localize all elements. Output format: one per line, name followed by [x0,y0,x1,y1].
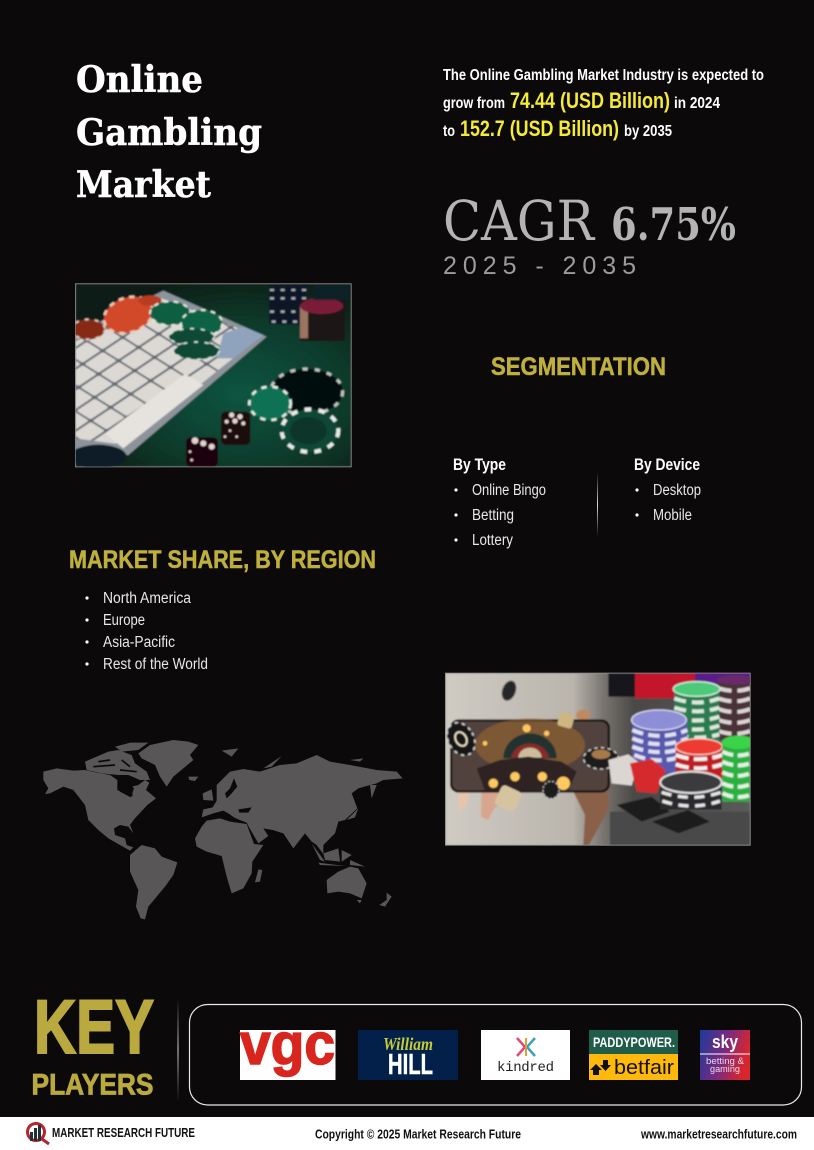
title: Online [76,59,203,101]
CAGR callout: CAGR [443,189,595,253]
market growth statement [443,67,764,141]
chips flying [500,680,518,702]
segment list: by device [634,455,701,524]
islands [188,748,377,867]
heading: segmentation: SEGMENTATION [491,353,666,381]
market growth statement: in 2024 [674,95,720,112]
CAGR callout: 2025 - 2035 [443,252,636,280]
market growth statement: to [443,123,455,140]
map inland seas [93,760,252,813]
logo: Sky Betting and Gaming: sky [712,1032,738,1052]
logo: Paddy Power Betfair: PADDYPOWER. [593,1034,675,1050]
segment list: by type: Online Bingo [472,482,546,499]
key players label: PLAYERS [32,1069,154,1102]
South America [130,845,177,919]
logo: Kindred: kindred [497,1060,554,1076]
logo: Sky Betting and Gaming [700,1030,750,1080]
segment list: by device: By Device [634,455,700,474]
segment list: by type: By Type [453,455,506,474]
black chip stack [660,786,722,810]
world map [43,740,403,919]
logo: Kindred [481,1030,570,1080]
logo: Paddy Power Betfair: betfair [614,1057,674,1079]
card fan [477,757,577,791]
chips on keyboard [102,294,154,335]
dice [608,754,639,786]
footer logo [28,1124,49,1144]
region list: North America [103,590,191,607]
keyboard body [76,291,267,457]
logo: Sky Betting and Gaming: gaming [710,1064,740,1075]
logo: William Hill: William [383,1034,433,1054]
region list: Asia-Pacific [103,634,175,651]
CAGR callout: 6.75% [611,198,736,251]
segment list: by device: Mobile [653,507,692,524]
key players label: KEY [34,985,154,1070]
heading: market share by region: MARKET SHARE, BY REGION [69,546,376,574]
dice [221,412,250,445]
Greenland [138,740,198,787]
logo: VGC: vgc [240,1012,335,1077]
segment list: by device: Desktop [653,482,701,499]
market growth statement: 74.44 (USD Billion) [510,88,670,113]
segment list: by type: Betting [472,507,514,524]
chip stacks [718,678,750,740]
keyboard base [610,812,750,845]
region list: Europe [103,612,145,629]
footer copyright: Copyright © 2025 Market Research Future [315,1126,521,1142]
segment list: by type [453,455,546,549]
logo: Sky Betting and Gaming: betting & [706,1056,745,1067]
key players panel [190,1004,802,1105]
Africa [195,818,263,893]
footer brand: MARKET RESEARCH FUTURE [52,1125,195,1140]
near black chips [271,369,343,414]
photo: keyboard and casino chips [70,283,352,469]
market growth statement: 152.7 (USD Billion) [460,116,619,141]
hands [458,792,470,812]
title: Gambling [76,112,262,154]
roulette wheel [503,733,557,758]
key players label [32,985,154,1102]
title [76,59,262,206]
North America [43,768,156,851]
title: Market [76,164,211,206]
logo: Paddy Power Betfair [589,1030,678,1080]
Eurasia [202,755,403,854]
phone [450,719,610,793]
market growth statement: by 2035 [624,123,672,140]
logo: William Hill [358,1030,458,1081]
market growth statement: grow from [443,95,505,112]
corner chip [76,444,127,467]
CAGR callout [443,189,736,280]
region list: Rest of the World [103,656,208,673]
logo: William Hill: HILL [388,1049,433,1081]
region list [85,590,208,673]
footer bar [0,1117,814,1150]
segment list: by type: Lottery [472,532,513,549]
Australia and New Zealand [327,867,392,907]
photo: phone casino and chip stacks [441,673,755,846]
far chip stacks [269,285,307,324]
